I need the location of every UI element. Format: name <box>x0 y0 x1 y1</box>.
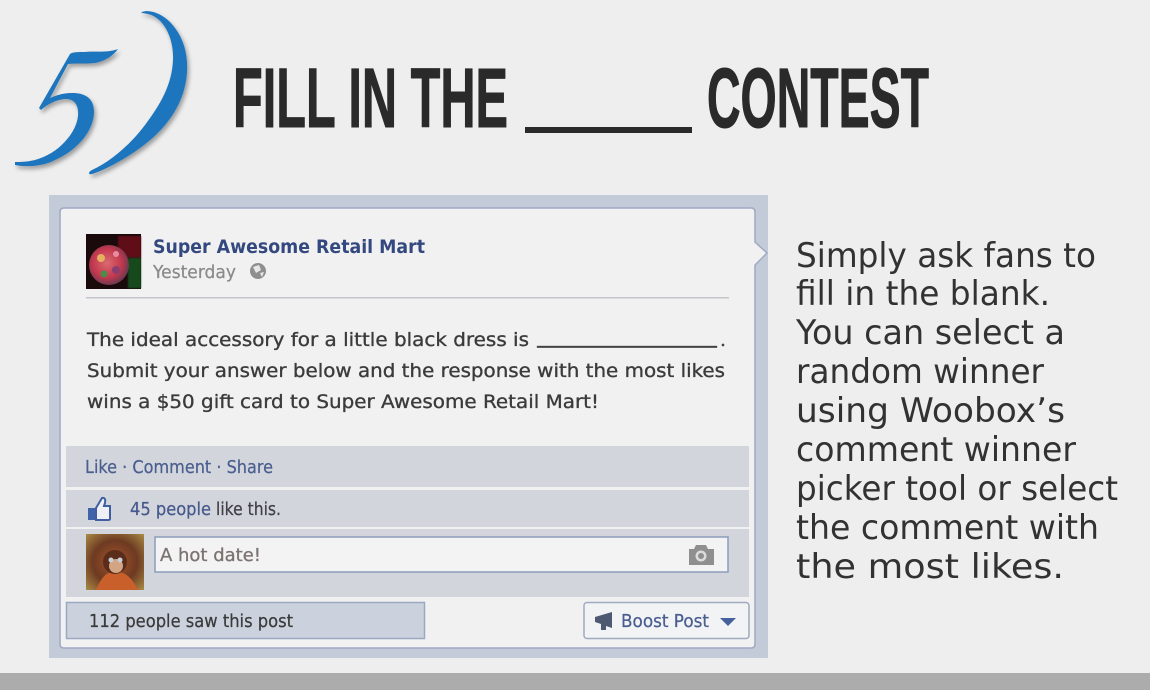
title <box>233 51 929 145</box>
post text: Submit your answer below and the response with the most likes <box>87 360 725 382</box>
description text: You can select a <box>795 313 1065 353</box>
description text: the comment with <box>796 508 1099 548</box>
description text <box>795 236 1118 587</box>
post text: The ideal accessory for a little black dress is <box>86 329 529 351</box>
icon: commenter avatar <box>86 534 144 590</box>
action bar <box>66 446 749 487</box>
description text: using Woobox’s <box>796 391 1065 431</box>
step number: 5) <box>15 11 187 174</box>
comment row: A hot date! <box>160 545 261 566</box>
post text: wins a $50 gift card to Super Awesome Retail Mart! <box>87 391 599 413</box>
likes row <box>66 490 749 527</box>
comment row <box>66 529 749 597</box>
post text <box>86 329 725 413</box>
post timestamp: Yesterday <box>152 262 236 283</box>
reach box <box>66 602 424 638</box>
icon: dropdown arrow <box>720 618 736 626</box>
panel: Facebook post screenshot <box>49 195 768 658</box>
icon: thumbs up <box>88 498 110 520</box>
description text: random winner <box>796 352 1044 392</box>
divider <box>86 297 729 298</box>
comment input <box>155 537 728 572</box>
description text: Simply ask fans to <box>796 236 1096 276</box>
title: FILL IN THE <box>233 51 508 145</box>
description text: the most likes. <box>796 547 1064 587</box>
reach box: 112 people saw this post <box>89 611 293 632</box>
boost post button <box>584 602 749 638</box>
description text: picker tool or select <box>796 469 1118 509</box>
likes row: like this. <box>216 499 281 520</box>
icon: camera <box>689 545 714 565</box>
icon: megaphone <box>595 612 612 630</box>
likes row: 45 people <box>130 499 211 520</box>
title: CONTEST <box>707 51 929 145</box>
description text: fill in the blank. <box>796 274 1050 314</box>
page name: Super Awesome Retail Mart <box>153 236 425 258</box>
description text: comment winner <box>796 430 1076 470</box>
action bar: Like · Comment · Share <box>85 457 273 478</box>
post card <box>60 208 767 648</box>
footer band <box>0 673 1150 690</box>
boost post button: Boost Post <box>621 611 709 632</box>
icon: page avatar <box>86 234 141 289</box>
